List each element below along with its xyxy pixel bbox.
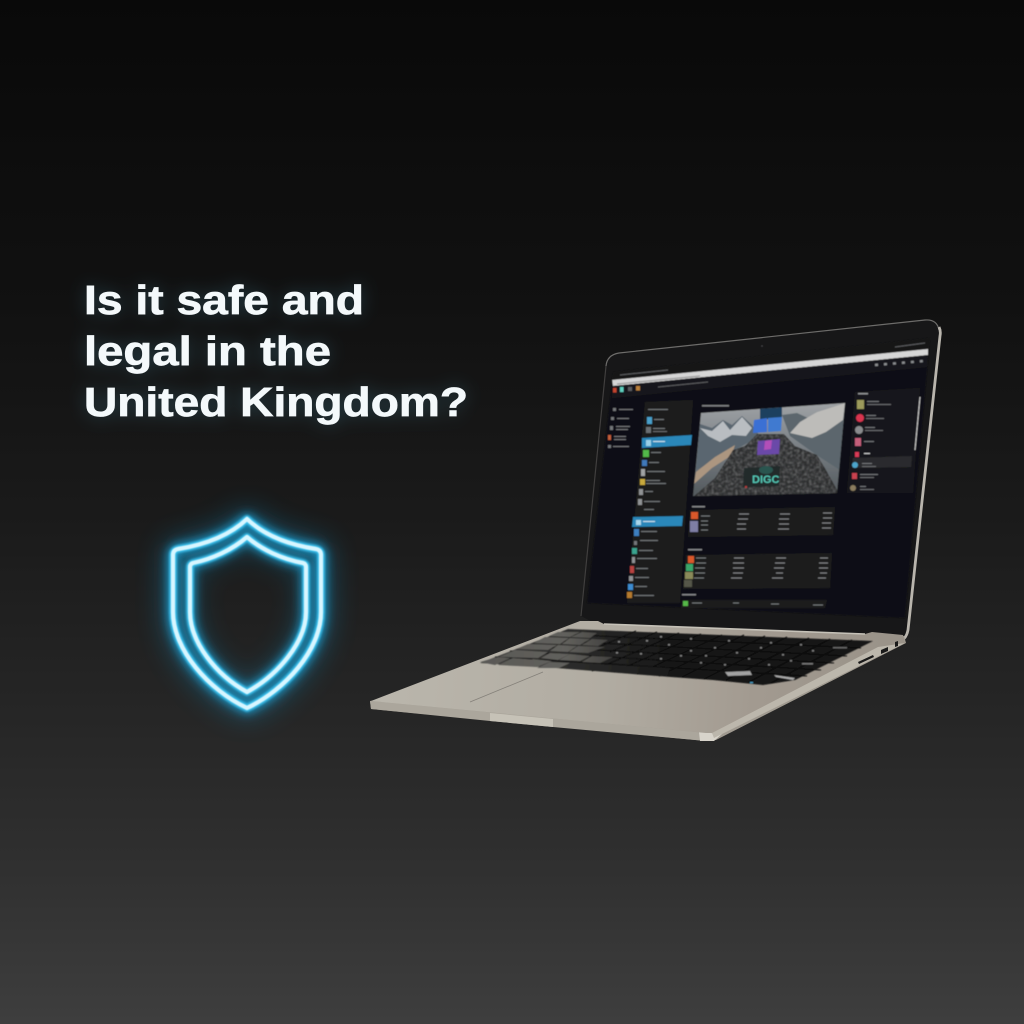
laptop base bbox=[370, 621, 906, 741]
laptop lid bbox=[581, 320, 940, 641]
icon: neon shield bbox=[173, 519, 321, 708]
table: middle bbox=[683, 549, 832, 589]
title: United Kingdom? bbox=[84, 379, 468, 425]
title: United Kingdom? bbox=[84, 379, 468, 425]
base deck bbox=[371, 621, 905, 733]
spacebar bbox=[560, 663, 670, 676]
side highlight strip bbox=[712, 643, 905, 738]
title bbox=[84, 277, 468, 425]
hero image: mountain bbox=[690, 400, 850, 500]
laptop bbox=[370, 320, 940, 741]
title: legal in the bbox=[84, 328, 331, 374]
side ports bbox=[858, 641, 898, 664]
table: bottom bbox=[681, 594, 827, 608]
title: legal in the bbox=[84, 328, 331, 374]
keyboard bbox=[480, 629, 873, 685]
hero image: mountain: DIGC bbox=[752, 474, 780, 486]
laptop screen bbox=[587, 338, 930, 618]
trackpad edge bbox=[470, 672, 543, 702]
right sidebar bbox=[847, 388, 920, 493]
left nav rail bbox=[608, 408, 633, 448]
browser toolbar bbox=[612, 338, 930, 398]
base side edge bbox=[370, 636, 906, 741]
grey left-side keys bbox=[480, 632, 613, 668]
hero heading bbox=[702, 405, 729, 407]
table: top bbox=[688, 506, 835, 537]
title: Is it safe and bbox=[84, 277, 364, 323]
app list panel bbox=[627, 400, 693, 603]
title: Is it safe and bbox=[84, 277, 364, 323]
